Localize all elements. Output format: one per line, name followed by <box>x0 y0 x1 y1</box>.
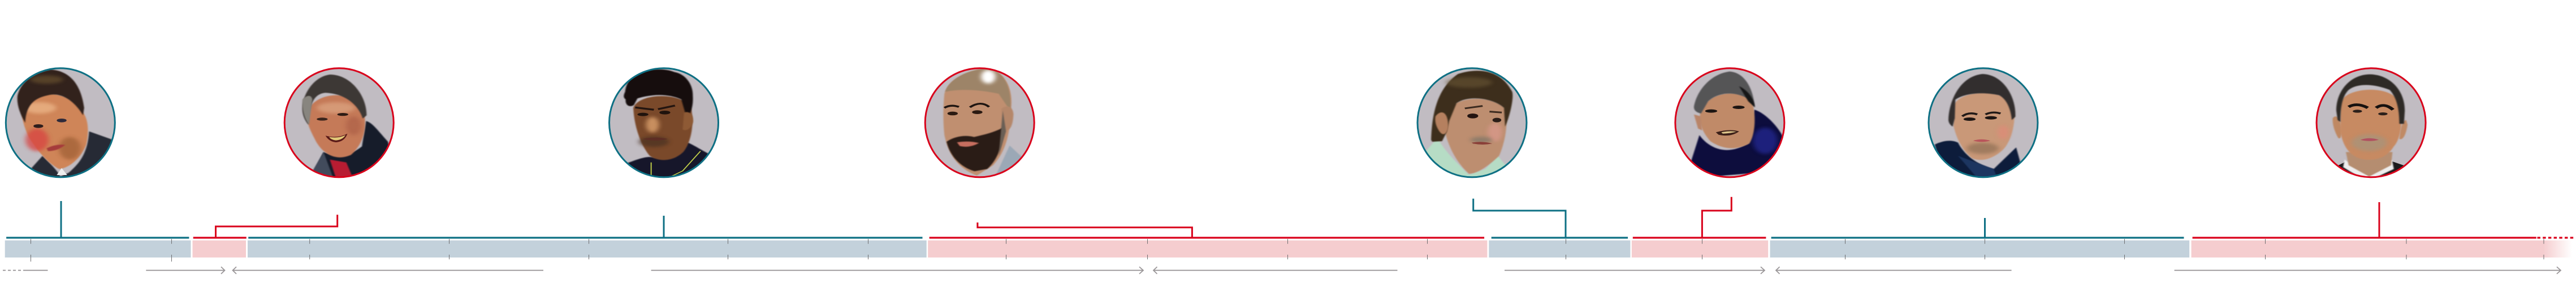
arrows: period spans below the timeline <box>3 267 2561 274</box>
connector: coach 2 <box>216 215 338 238</box>
timeline tenure bars <box>5 241 2572 258</box>
portrait: coach 6, red ring <box>1675 67 1785 178</box>
connector: coach 1 <box>60 201 62 238</box>
connector: coach 8 <box>2378 202 2380 238</box>
portrait: coach 2, red ring <box>284 67 394 178</box>
connector: coach 5 <box>1473 199 1566 238</box>
connector: coach 3 <box>663 216 665 238</box>
connector: coach 6 <box>1702 197 1731 238</box>
portrait: coach 3, teal ring <box>608 67 719 178</box>
timeline year ticks <box>31 239 2544 261</box>
connector: coach 7 <box>1984 218 1986 238</box>
portrait: coach 7, teal ring <box>1928 67 2038 178</box>
portrait: coach 1, teal ring <box>6 67 116 178</box>
teal and red tenure lines <box>6 237 2574 239</box>
connector: coach 4 <box>978 222 1192 238</box>
portrait: coach 4, red ring <box>924 67 1035 178</box>
portrait: coach 5, teal ring <box>1417 67 1527 178</box>
portrait: coach 8, red ring <box>2316 67 2426 178</box>
